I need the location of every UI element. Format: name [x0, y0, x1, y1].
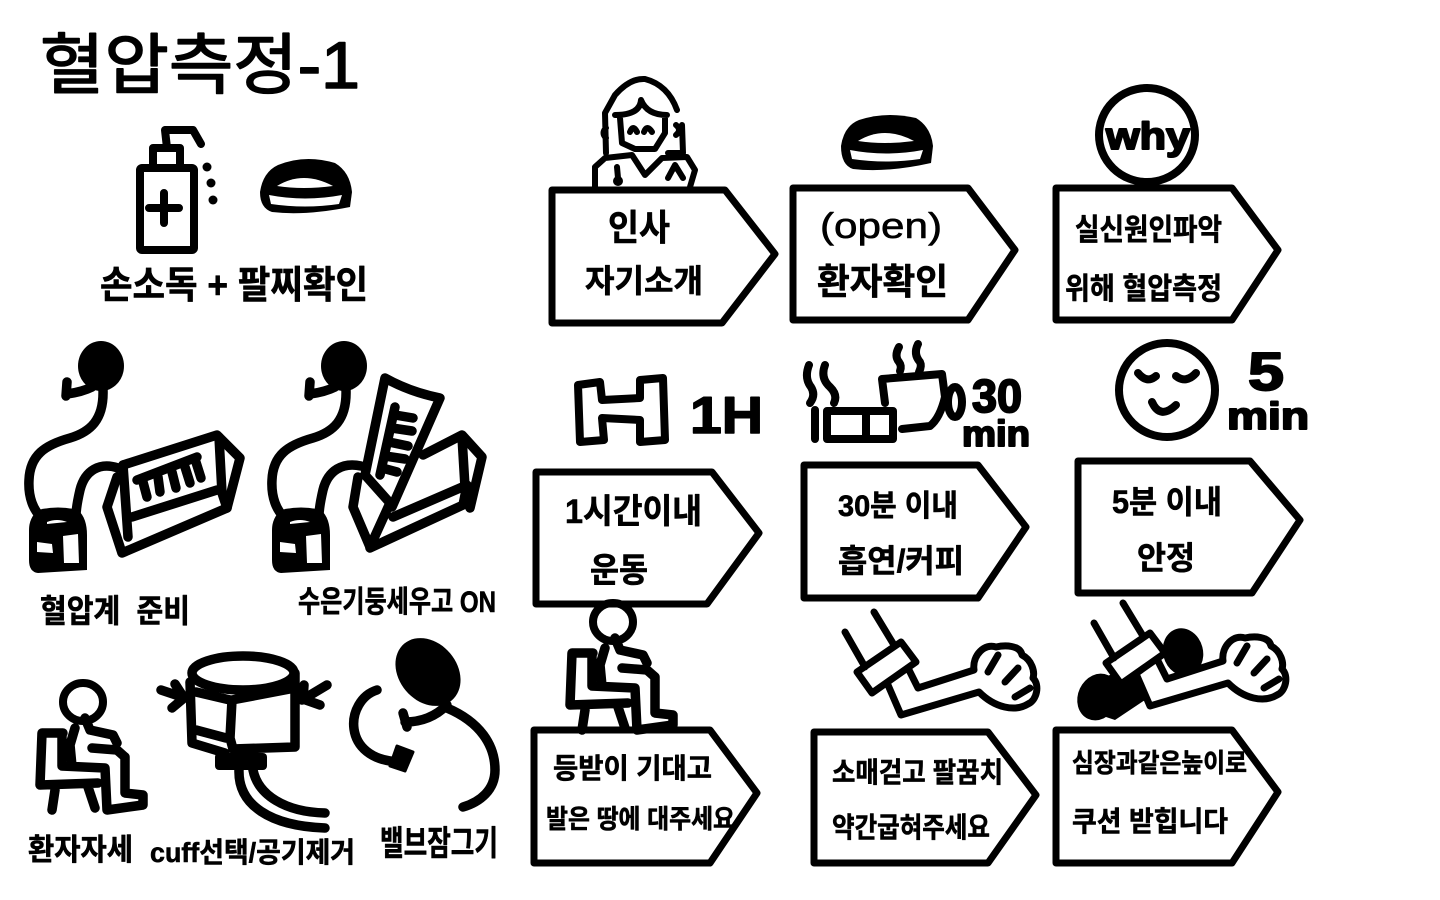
icon: seated patient	[40, 683, 143, 810]
sign: rest	[1078, 461, 1300, 593]
icon: relaxed face	[1119, 343, 1215, 437]
label: 1H: 1H	[690, 387, 763, 445]
text: measure blood pressure: 위해 혈압측정	[1065, 273, 1222, 306]
panel: roll up sleeve and bend elbow	[814, 612, 1037, 863]
label: patient posture: 환자자세	[28, 834, 133, 867]
panel: cuff selection and air removal	[150, 656, 355, 868]
text: lean on backrest: 등받이 기대고	[553, 753, 712, 784]
panel: rest within five minutes	[1078, 342, 1309, 593]
text: roll up sleeve, elbow: 소매걷고 팔꿈치	[832, 757, 1003, 788]
icon: dumbbell	[578, 378, 665, 442]
text: identify cause of syncope: 실신원인파악	[1075, 214, 1222, 247]
text: open: (open)	[820, 205, 942, 246]
text: self-introduction: 자기소개	[585, 263, 703, 299]
label: min: min	[962, 413, 1030, 454]
label: raise mercury column, turn on: 수은기둥세우고 ON	[298, 586, 496, 619]
text: within one hour: 1시간이내	[565, 493, 702, 531]
text: bend slightly: 약간굽혀주세요	[832, 812, 990, 843]
sign: open patient identification	[793, 188, 1015, 320]
icon: wristband	[841, 115, 933, 170]
text: greeting: 인사	[608, 207, 670, 248]
icon: cigarette	[807, 365, 893, 439]
panel: lean back and feet on floor	[534, 603, 757, 863]
label: 30 min: 30	[972, 370, 1022, 422]
icon: closed sphygmomanometer	[29, 341, 240, 573]
label: close valve: 밸브잠그기	[380, 825, 498, 863]
panel: exercise within one hour	[536, 378, 763, 604]
label: cuff selection / air removal: cuff선택/공기제거	[150, 837, 355, 868]
icon: sanitizer bottle	[140, 130, 218, 250]
panel: raise mercury column and switch on	[272, 341, 496, 619]
panel: close valve	[354, 625, 498, 863]
sign: exercise	[536, 472, 759, 604]
panel: patient identification	[793, 115, 1015, 320]
sign: smoking or coffee	[804, 465, 1026, 598]
text: support with cushion: 쿠션 받힙니다	[1072, 806, 1228, 837]
text: at heart level: 심장과같은높이로	[1072, 748, 1247, 778]
icon: cuff	[161, 656, 327, 828]
panel: greeting and self-introduction	[552, 79, 775, 323]
sign: sleeve	[814, 732, 1036, 863]
label: prepare sphygmomanometer: 혈압계 준비	[40, 593, 190, 629]
text: exercise: 운동	[590, 552, 648, 590]
icon: wristband	[260, 159, 352, 213]
icon: opened sphygmomanometer	[272, 341, 482, 573]
panel: hand sanitizing and wristband check	[100, 130, 368, 307]
icon: nurse	[595, 79, 695, 187]
text: within 5 minutes: 5분 이내	[1112, 484, 1222, 520]
sign: cushion	[1056, 730, 1278, 863]
panel: smoking or coffee within thirty minutes	[804, 344, 1030, 598]
icon: seated patient	[570, 603, 673, 730]
label: min: min	[1227, 396, 1309, 438]
text: within 30 minutes: 30분 이내	[838, 490, 958, 523]
sign: greeting	[552, 190, 775, 323]
sign: reason	[1056, 188, 1278, 320]
icon: bulb with rotation arrow	[354, 625, 495, 807]
icon: arm on cushion	[1070, 603, 1286, 727]
label: 5: 5	[1248, 342, 1284, 402]
sign: posture	[534, 730, 757, 863]
panel: support with cushion at heart level	[1056, 603, 1286, 863]
icon: why bubble: why	[1105, 116, 1190, 158]
icon: coffee cup	[882, 344, 962, 429]
panel: reason for measuring	[1056, 88, 1278, 320]
label: hand sanitizing + wristband check: 손소독 + 팔찌확인	[100, 265, 368, 307]
icon: arm with sleeve	[845, 612, 1037, 715]
text: patient check: 환자확인	[817, 261, 948, 302]
text: smoking / coffee: 흡연/커피	[838, 543, 964, 579]
icon: why bubble	[1099, 88, 1195, 182]
text: stabilize: 안정	[1137, 540, 1195, 576]
title: 혈압측정-1	[40, 28, 360, 102]
text: feet on floor: 발은 땅에 대주세요	[546, 804, 735, 834]
panel: prepare sphygmomanometer	[29, 341, 240, 629]
panel: patient posture	[28, 683, 143, 867]
